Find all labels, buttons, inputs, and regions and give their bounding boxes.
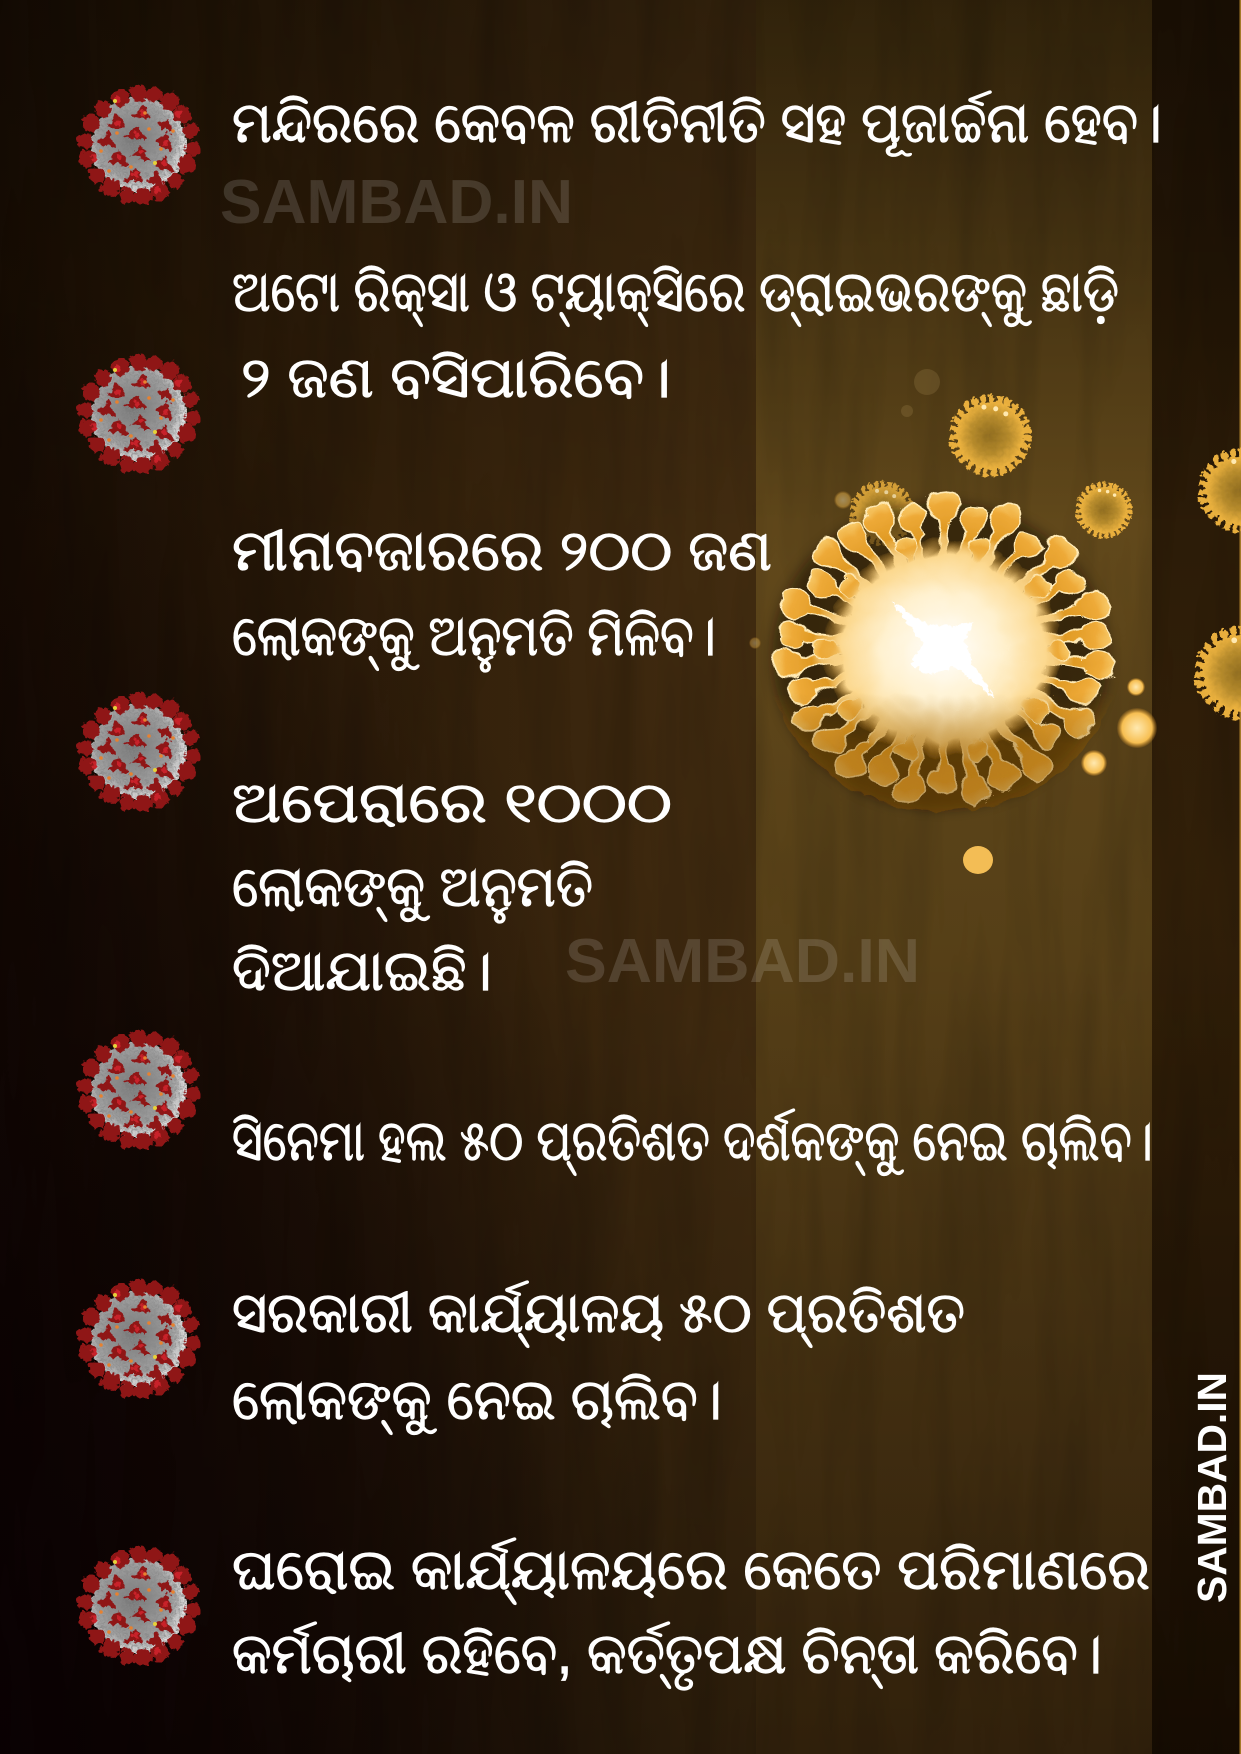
text: auto rickshaw and taxi rule: ଅଟୋ ରିକ୍ସା ଓ ଟ୍ୟାକ୍ସିରେ ଡ୍ରାଇଭରଙ୍କୁ ଛାଡ଼ି (232, 260, 1119, 327)
watermark: top: SAMBAD.IN (220, 168, 573, 237)
icon: coronavirus bullet 1 (76, 83, 198, 203)
watermark: vertical site name: SAMBAD.IN (1189, 1372, 1235, 1603)
icon: coronavirus bullet 4 (76, 1028, 198, 1148)
text: private office rule (232, 1537, 1150, 1690)
watermark: middle: SAMBAD.IN (565, 927, 920, 996)
text: meena bazaar rule (232, 519, 772, 672)
text: government office rule: ସରକାରୀ କାର୍ଯ୍ୟାଳୟ ୫୦ ପ୍ରତିଶତ (232, 1280, 965, 1348)
text: meena bazaar rule: ଲୋକଙ୍କୁ ଅନୁମତି ମିଳିବ। (232, 604, 716, 672)
icon: coronavirus bullet 6 (76, 1544, 198, 1664)
text: private office rule: କର୍ମଚାରୀ ରହିବେ, କର୍ତ୍ତୃପକ୍ଷ ଚିନ୍ତା କରିବେ। (232, 1621, 1102, 1690)
text: opera rule: ଦିଆଯାଇଛି। (232, 939, 492, 1003)
text: opera rule (232, 771, 672, 1003)
small gold viruses (853, 398, 1241, 712)
text: government office rule (232, 1280, 965, 1435)
main glowing virus (762, 483, 1118, 809)
icon: coronavirus bullet 2 (76, 352, 198, 472)
icon: coronavirus bullet 3 (76, 690, 198, 810)
bokeh lights (749, 369, 1157, 874)
text: government office rule: ଲୋକଙ୍କୁ ନେଇ ଚାଲିବ। (232, 1368, 722, 1435)
icon: coronavirus bullet 5 (76, 1277, 198, 1397)
text: opera rule: ଲୋକଙ୍କୁ ଅନୁମତି (232, 855, 593, 923)
text: meena bazaar rule: ମୀନାବଜାରରେ ୨୦୦ ଜଣ (232, 519, 772, 583)
text: opera rule: ଅପେରାରେ ୧୦୦୦ (232, 771, 672, 835)
text: auto rickshaw and taxi rule: ୨ ଜଣ ବସିପାରିବେ। (241, 346, 671, 410)
gold virus illustration cluster (749, 369, 1241, 874)
text: temple rule: ମନ୍ଦିରରେ କେବଳ ରୀତିନୀତି ସହ ପୂଜାର୍ଚ୍ଚନା ହେବ। (232, 90, 1162, 158)
text: private office rule: ଘରୋଇ କାର୍ଯ୍ୟାଳୟରେ କେତେ ପରିମାଣରେ (232, 1537, 1150, 1605)
text: auto rickshaw and taxi rule (232, 260, 1119, 410)
